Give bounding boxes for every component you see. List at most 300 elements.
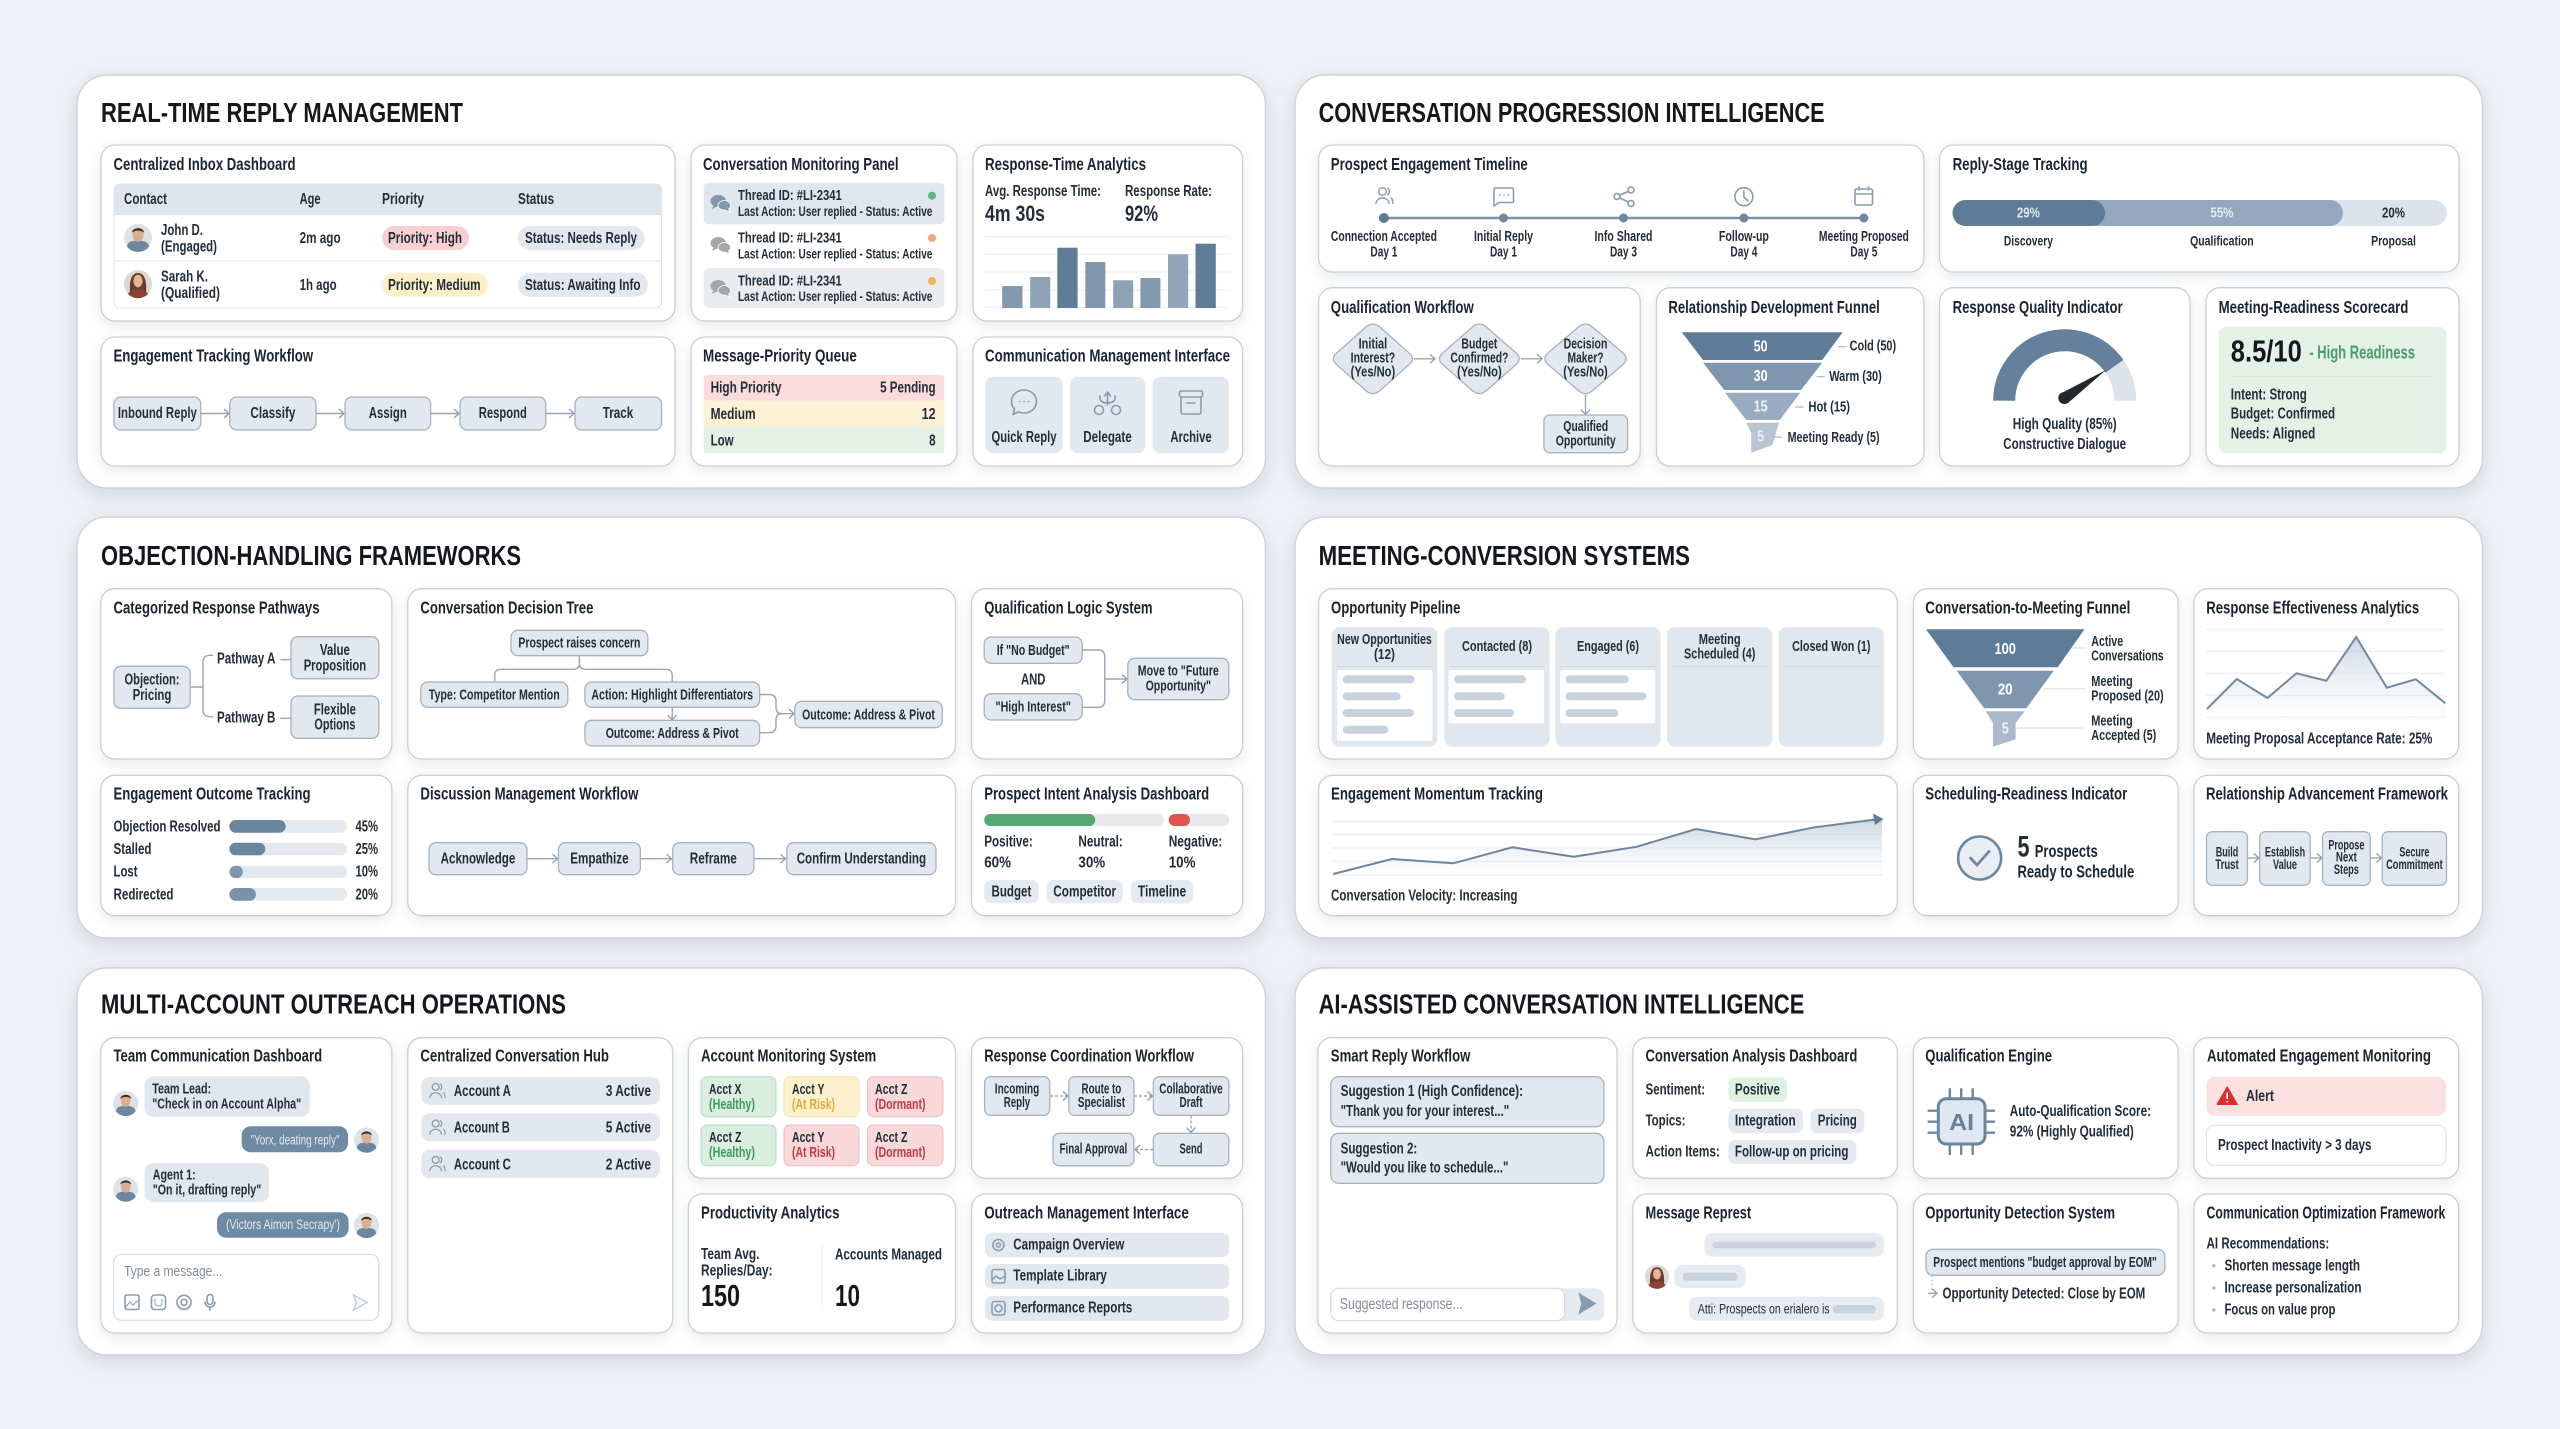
milestone: initial reply bbox=[1474, 188, 1533, 261]
card title: Scheduling-Readiness Indicator bbox=[1925, 783, 2127, 803]
card title: Discussion Management Workflow bbox=[420, 783, 639, 803]
funnel chart: 30 bbox=[1754, 368, 1768, 385]
funnel labels: Proposed (20) bbox=[2091, 688, 2164, 704]
column: meeting scheduled bbox=[1667, 627, 1772, 747]
avatar: John D. bbox=[124, 224, 152, 252]
decision: decision maker: Maker? bbox=[1568, 351, 1604, 367]
node: final outcome bbox=[795, 701, 942, 728]
card: message repres bbox=[1633, 1194, 1897, 1333]
workflow steps: Respond bbox=[479, 405, 527, 422]
milestone: initial reply: Day 1 bbox=[1490, 245, 1517, 261]
column: new opportunities bbox=[1332, 627, 1437, 747]
pill: priority medium bbox=[382, 273, 488, 297]
pill: status awaiting info bbox=[518, 273, 648, 297]
card: opportunity pipeline bbox=[1319, 589, 1897, 759]
tile: acct Z dormant 2 bbox=[868, 1125, 943, 1166]
decision: budget confirmed: (Yes/No) bbox=[1457, 365, 1502, 381]
funnel labels bbox=[2091, 634, 2164, 744]
card: scheduling-readiness indicator bbox=[1913, 775, 2178, 916]
funnel labels: Meeting bbox=[2091, 674, 2133, 690]
tile: acct Y at risk: Acct Y bbox=[792, 1082, 825, 1098]
workflow diagram: Specialist bbox=[1078, 1095, 1125, 1111]
card title: Response-Time Analytics bbox=[985, 154, 1146, 174]
pill: priority high: Priority: High bbox=[388, 230, 462, 247]
row: topics: Pricing bbox=[1818, 1113, 1857, 1130]
milestone: info shared: Day 3 bbox=[1610, 245, 1637, 261]
outcome: qualified opportunity: Opportunity bbox=[1556, 434, 1616, 450]
stacked stage bar bbox=[1953, 200, 2447, 226]
column: new opportunities: (12) bbox=[1374, 647, 1395, 663]
heading: AI-assisted conversation intelligence: AI-ASSISTED CONVERSATION INTELLIGENCE bbox=[1319, 989, 1804, 1020]
node: move to future opportunity: Move to "Future bbox=[1138, 664, 1219, 680]
menu: performance reports: Performance Reports bbox=[1013, 1300, 1132, 1317]
decision: initial interest: (Yes/No) bbox=[1351, 365, 1395, 381]
thread row 2: Last Action: User replied - Status: Active bbox=[738, 247, 933, 262]
thread row 3: Thread ID: #LI-2341 bbox=[738, 273, 842, 289]
AI recommendations list bbox=[2206, 1235, 2362, 1318]
outgoing placeholder bubble bbox=[1704, 1233, 1884, 1257]
card title: Message-Priority Queue bbox=[703, 346, 857, 366]
milestone: connection accepted: Day 1 bbox=[1370, 245, 1397, 261]
pill: status needs reply bbox=[518, 226, 644, 250]
card title: Prospect Intent Analysis Dashboard bbox=[984, 783, 1209, 803]
workflow steps: Track bbox=[603, 405, 634, 422]
row: account A: 3 Active bbox=[606, 1083, 651, 1100]
card: response quality indicator bbox=[1940, 288, 2190, 466]
panel: meeting-conversion systems bbox=[1295, 517, 2482, 938]
milestone: connection accepted: Connection Accepted bbox=[1331, 229, 1437, 245]
card: communication management interface bbox=[973, 337, 1242, 466]
row: redirected: Redirected bbox=[114, 886, 174, 903]
card title: Smart Reply Workflow bbox=[1331, 1046, 1471, 1066]
alert banner bbox=[2206, 1077, 2446, 1116]
framework steps: Secure bbox=[2399, 845, 2430, 860]
card: engagement tracking workflow bbox=[101, 337, 675, 466]
message: agent 1 bbox=[113, 1163, 269, 1202]
inbox table: Sarah K. bbox=[161, 269, 208, 286]
tile: acct Z dormant bbox=[868, 1077, 943, 1117]
row: action items bbox=[1646, 1140, 1856, 1164]
milestone: meeting proposed: Day 5 bbox=[1850, 245, 1877, 261]
framework steps: Steps bbox=[2334, 862, 2359, 877]
node: value proposition: Value bbox=[320, 642, 350, 659]
heading: multi-account outreach operations: MULTI-ACCOUNT OUTREACH OPERATIONS bbox=[101, 989, 566, 1020]
inbox table: (Qualified) bbox=[161, 285, 220, 302]
card: prospect engagement timeline bbox=[1319, 145, 1924, 272]
funnel chart bbox=[1682, 332, 1843, 453]
heading: conversation progression intelligence: CONVERSATION PROGRESSION INTELLIGENCE bbox=[1319, 97, 1825, 128]
card title: Account Monitoring System bbox=[701, 1046, 876, 1066]
card title: Response Effectiveness Analytics bbox=[2206, 597, 2419, 617]
queue rows: Low bbox=[711, 433, 734, 450]
outcome: qualified opportunity bbox=[1544, 415, 1628, 453]
workflow steps: Assign bbox=[369, 405, 407, 422]
card title: Centralized Conversation Hub bbox=[420, 1046, 609, 1066]
thread row 3: Last Action: User replied - Status: Active bbox=[738, 289, 933, 304]
row: action items: Action Items: bbox=[1646, 1144, 1720, 1161]
tile: acct X healthy bbox=[701, 1077, 776, 1117]
decision: budget confirmed: Confirmed? bbox=[1450, 351, 1509, 367]
suggested response input: Suggested response... bbox=[1340, 1296, 1463, 1313]
tile: acct Y at risk bbox=[784, 1077, 859, 1117]
readiness text bbox=[2018, 831, 2134, 881]
pathway labels bbox=[217, 650, 275, 727]
column: contacted bbox=[1444, 627, 1550, 747]
logic connectors bbox=[1082, 650, 1105, 707]
funnel labels: Hot (15) bbox=[1808, 400, 1850, 416]
node: if no budget bbox=[984, 637, 1082, 663]
chart caption: Conversation Velocity: Increasing bbox=[1331, 888, 1518, 905]
column: meeting scheduled: Scheduled (4) bbox=[1684, 647, 1756, 663]
tile: acct Y at risk red: (At Risk) bbox=[792, 1145, 835, 1161]
pathway labels: Pathway B bbox=[217, 710, 275, 727]
decision: initial interest: Interest? bbox=[1351, 351, 1395, 367]
workflow diagram: Final Approval bbox=[1060, 1142, 1127, 1158]
stage labels: Qualification bbox=[2190, 233, 2254, 248]
stacked stage bar: 20% bbox=[2382, 206, 2405, 222]
node: move to future opportunity bbox=[1128, 658, 1229, 700]
score box: Intent: Strong bbox=[2231, 386, 2307, 403]
metric: average response time: Avg. Response Time: bbox=[985, 183, 1101, 200]
detected signal bbox=[1926, 1249, 2165, 1275]
qualification score bbox=[2010, 1103, 2151, 1141]
milestone: follow-up: Follow-up bbox=[1719, 229, 1769, 245]
tile: acct Z healthy: (Healthy) bbox=[709, 1145, 755, 1161]
row: account B: 5 Active bbox=[606, 1120, 651, 1137]
thread row 2 bbox=[710, 231, 936, 262]
card: communication optimization framework bbox=[2194, 1194, 2459, 1333]
arrow bbox=[1521, 358, 1542, 360]
score box: - High Readiness bbox=[2309, 342, 2415, 362]
card title: Opportunity Detection System bbox=[1925, 1203, 2115, 1223]
row: topics: Integration bbox=[1735, 1113, 1796, 1130]
funnel labels: Meeting bbox=[2091, 714, 2133, 730]
node: flexible options: Options bbox=[314, 717, 355, 734]
outgoing message bubble: Atti: Prospects on erialero is bbox=[1698, 1301, 1830, 1316]
funnel leader lines bbox=[2017, 648, 2086, 728]
column: contacted: Contacted (8) bbox=[1462, 639, 1532, 655]
framework steps bbox=[2206, 832, 2446, 885]
decision: decision maker: Decision bbox=[1564, 337, 1607, 353]
card: discussion management workflow bbox=[408, 775, 956, 916]
framework steps: Propose bbox=[2328, 837, 2365, 852]
panel: conversation progression intelligence bbox=[1295, 75, 2482, 488]
AI recommendations list: Shorten message length bbox=[2224, 1258, 2360, 1275]
column: closed won bbox=[1779, 627, 1884, 747]
card title: Meeting-Readiness Scorecard bbox=[2219, 297, 2408, 317]
decision: decision maker: (Yes/No) bbox=[1563, 365, 1608, 381]
row: action items: Follow-up on pricing bbox=[1735, 1144, 1848, 1161]
workflow diagram: Collaborative bbox=[1159, 1081, 1223, 1097]
node: action highlight differentiators: Action: Highlight Differentiators bbox=[591, 687, 753, 703]
node: outcome address and pivot bbox=[585, 720, 760, 746]
tile: archive bbox=[1153, 377, 1229, 453]
node: value proposition bbox=[291, 637, 379, 679]
card: centralized conversation hub bbox=[408, 1038, 673, 1333]
score box: Needs: Aligned bbox=[2231, 426, 2315, 443]
tile: acct Y at risk: (At Risk) bbox=[792, 1097, 835, 1113]
node: value proposition: Proposition bbox=[304, 658, 366, 675]
framework steps: Commitment bbox=[2386, 857, 2443, 872]
tree connectors bbox=[495, 656, 672, 682]
row: account C: Account C bbox=[454, 1156, 511, 1173]
card title: Categorized Response Pathways bbox=[114, 597, 320, 617]
readiness text: Ready to Schedule bbox=[2018, 861, 2134, 881]
momentum chart bbox=[1331, 814, 1884, 875]
tile: acct Z dormant: (Dormant) bbox=[875, 1097, 926, 1113]
card title: Reply-Stage Tracking bbox=[1953, 154, 2088, 174]
row: account B: Account B bbox=[454, 1120, 510, 1137]
card title: Communication Management Interface bbox=[985, 346, 1230, 366]
column: engaged: Engaged (6) bbox=[1577, 639, 1639, 655]
decision: initial interest: Initial bbox=[1359, 337, 1387, 353]
card: qualification engine bbox=[1913, 1038, 2178, 1178]
card title: Qualification Logic System bbox=[984, 597, 1153, 617]
sentiment values: Negative: bbox=[1169, 834, 1222, 851]
card: prospect intent analysis dashboard bbox=[972, 775, 1243, 916]
node: type competitor mention: Type: Competitor Mention bbox=[429, 687, 560, 703]
card title: Productivity Analytics bbox=[701, 1203, 840, 1223]
message: agent 1: "On it, drafting reply" bbox=[153, 1182, 261, 1198]
gauge caption: Constructive Dialogue bbox=[2003, 436, 2126, 453]
heading: objection-handling frameworks: OBJECTION-HANDLING FRAMEWORKS bbox=[101, 540, 521, 571]
card: smart reply workflow bbox=[1318, 1038, 1617, 1333]
decision: initial interest bbox=[1333, 324, 1412, 394]
card: qualification logic system bbox=[972, 589, 1243, 759]
message: agent 1: Agent 1: bbox=[153, 1167, 196, 1183]
message input: Type a message... bbox=[124, 1264, 222, 1280]
node: objection pricing: Pricing bbox=[133, 687, 171, 704]
stage labels: Proposal bbox=[2371, 233, 2416, 248]
row: account C: 2 Active bbox=[606, 1156, 651, 1173]
row: account B bbox=[421, 1113, 660, 1141]
tile: delegate bbox=[1070, 377, 1145, 453]
outcome: qualified opportunity: Qualified bbox=[1563, 419, 1608, 435]
message: status bubble: (Victors Aimon Secrapy') bbox=[226, 1217, 340, 1232]
detected signal: Prospect mentions "budget approval by EOM" bbox=[1933, 1255, 2157, 1271]
metric: accounts managed: Accounts Managed bbox=[835, 1246, 942, 1263]
card: productivity analytics bbox=[688, 1194, 956, 1333]
AI recommendations list: AI Recommendations: bbox=[2206, 1235, 2329, 1252]
incoming placeholder bubble bbox=[1645, 1265, 1746, 1289]
column: meeting scheduled: Meeting bbox=[1699, 632, 1741, 648]
pill: priority high bbox=[382, 226, 469, 250]
row: stalled: Stalled bbox=[114, 841, 152, 858]
card: account monitoring system bbox=[688, 1038, 956, 1178]
funnel labels: Cold (50) bbox=[1850, 339, 1896, 355]
sentiment values: 30% bbox=[1078, 854, 1105, 871]
card: engagement outcome tracking bbox=[101, 775, 392, 916]
funnel labels: Meeting Ready (5) bbox=[1788, 430, 1880, 446]
framework steps: Next bbox=[2336, 850, 2357, 865]
workflow diagram bbox=[985, 1077, 1229, 1166]
metric: average response time bbox=[985, 183, 1101, 226]
suggestion 1: "Thank you for your interest..." bbox=[1341, 1103, 1509, 1120]
alert detail: Prospect Inactivity > 3 days bbox=[2218, 1137, 2372, 1154]
node: action highlight differentiators bbox=[585, 682, 760, 707]
milestone: initial reply: Initial Reply bbox=[1474, 229, 1533, 245]
milestone: connection accepted bbox=[1331, 188, 1437, 261]
menu: campaign overview: Campaign Overview bbox=[1013, 1236, 1125, 1253]
funnel labels: Accepted (5) bbox=[2091, 728, 2156, 744]
workflow steps bbox=[429, 843, 936, 875]
card title: Conversation Monitoring Panel bbox=[703, 154, 899, 174]
pill: status needs reply: Status: Needs Reply bbox=[525, 230, 637, 247]
stage labels: Discovery bbox=[2004, 233, 2053, 248]
row: objection resolved: Objection Resolved bbox=[114, 818, 220, 835]
icon: check circle bbox=[1958, 836, 2001, 880]
queue rows bbox=[704, 375, 944, 453]
chart caption: Meeting Proposal Acceptance Rate: 25% bbox=[2206, 730, 2433, 747]
arrow bbox=[1584, 394, 1586, 414]
card title: Prospect Engagement Timeline bbox=[1331, 154, 1528, 174]
funnel labels bbox=[1772, 339, 1896, 446]
framework steps: Build bbox=[2216, 845, 2238, 860]
metric: team average replies: 150 bbox=[701, 1278, 740, 1313]
funnel chart: 5 bbox=[2002, 720, 2009, 737]
stacked stage bar: 29% bbox=[2017, 206, 2040, 222]
card title: Automated Engagement Monitoring bbox=[2207, 1046, 2431, 1066]
row: lost: Lost bbox=[114, 864, 138, 881]
tile: acct Z healthy: Acct Z bbox=[709, 1130, 742, 1146]
card: conversation-to-meeting funnel bbox=[1913, 589, 2178, 759]
funnel chart: 15 bbox=[1754, 398, 1768, 415]
card: automated engagement monitoring bbox=[2194, 1038, 2459, 1178]
workflow steps: Reframe bbox=[690, 850, 737, 867]
card: outreach management interface bbox=[972, 1194, 1243, 1333]
score box: Budget: Confirmed bbox=[2231, 406, 2335, 423]
thread row 1 bbox=[704, 183, 944, 224]
funnel labels: Conversations bbox=[2091, 648, 2164, 664]
topic tags: Competitor bbox=[1053, 884, 1116, 901]
funnel chart: 20 bbox=[1998, 681, 2013, 698]
framework steps: Value bbox=[2273, 857, 2297, 872]
outgoing message bubble bbox=[1689, 1297, 1884, 1321]
row: objection resolved bbox=[114, 818, 378, 835]
metric: average response time: 4m 30s bbox=[985, 201, 1045, 226]
row: sentiment: Positive bbox=[1735, 1082, 1780, 1099]
tile: acct X healthy: Acct X bbox=[709, 1082, 742, 1098]
node: flexible options: Flexible bbox=[314, 701, 356, 718]
card: meeting-readiness scorecard bbox=[2206, 288, 2459, 466]
pathway connectors bbox=[190, 655, 291, 718]
node: outcome address and pivot: Outcome: Address & Pivot bbox=[606, 726, 739, 742]
heading: real-time reply management: REAL-TIME REPLY MANAGEMENT bbox=[101, 97, 463, 128]
AI recommendations list: Increase personalization bbox=[2224, 1279, 2362, 1296]
workflow steps bbox=[114, 397, 662, 430]
metric: accounts managed: 10 bbox=[835, 1278, 860, 1313]
inbox table: Priority bbox=[382, 191, 424, 208]
sentiment values: Neutral: bbox=[1078, 834, 1123, 851]
row: account C bbox=[421, 1150, 660, 1178]
column: new opportunities: New Opportunities bbox=[1337, 632, 1432, 648]
suggested response input bbox=[1331, 1288, 1604, 1321]
menu: campaign overview bbox=[985, 1233, 1229, 1257]
card: relationship advancement framework bbox=[2194, 775, 2459, 916]
workflow steps: Acknowledge bbox=[441, 850, 516, 867]
row: sentiment: Sentiment: bbox=[1646, 1082, 1705, 1099]
node: high interest: "High Interest" bbox=[996, 700, 1071, 716]
funnel chart: 100 bbox=[1994, 641, 2016, 658]
message: team lead bbox=[113, 1076, 310, 1117]
qualification score: 92% (Highly Qualified) bbox=[2010, 1124, 2134, 1141]
alert banner: Alert bbox=[2246, 1088, 2274, 1105]
tile: quick reply: Quick Reply bbox=[992, 429, 1057, 446]
menu: template library bbox=[985, 1264, 1229, 1289]
milestone: follow-up bbox=[1719, 188, 1769, 261]
readiness text: 5 bbox=[2018, 831, 2030, 864]
card: response-time analytics bbox=[973, 145, 1242, 321]
inbox table: John D. bbox=[161, 222, 203, 239]
workflow diagram: Reply bbox=[1004, 1095, 1030, 1111]
row: stalled: 25% bbox=[356, 841, 378, 858]
timeline axis bbox=[1379, 213, 1868, 223]
card title: Conversation Decision Tree bbox=[420, 597, 594, 617]
row: topics: Topics: bbox=[1646, 1113, 1686, 1130]
row: redirected: 20% bbox=[356, 886, 378, 903]
card: relationship development funnel bbox=[1656, 288, 1924, 466]
row: topics bbox=[1646, 1109, 1864, 1133]
card title: Conversation Analysis Dashboard bbox=[1646, 1046, 1857, 1066]
framework steps: Trust bbox=[2215, 857, 2239, 872]
node: prospect raises concern: Prospect raises concern bbox=[518, 636, 640, 652]
message: reply bubble bbox=[242, 1126, 379, 1153]
row: account A: Account A bbox=[454, 1083, 511, 1100]
heading: meeting-conversion systems: MEETING-CONVERSION SYSTEMS bbox=[1319, 540, 1690, 571]
tile: archive: Archive bbox=[1170, 429, 1212, 446]
workflow diagram: Send bbox=[1180, 1142, 1202, 1158]
tile: acct Z dormant: Acct Z bbox=[875, 1082, 908, 1098]
card title: Opportunity Pipeline bbox=[1331, 597, 1461, 617]
node: prospect raises concern bbox=[511, 630, 648, 656]
sentiment values: 60% bbox=[984, 854, 1011, 871]
operator: and: AND bbox=[1021, 672, 1045, 689]
funnel chart bbox=[1926, 629, 2084, 747]
alert detail bbox=[2206, 1125, 2446, 1165]
tile: quick reply bbox=[985, 377, 1063, 453]
gauge caption: High Quality (85%) bbox=[2013, 416, 2117, 433]
readiness text: Prospects bbox=[2035, 841, 2098, 861]
workflow diagram: Route to bbox=[1082, 1081, 1121, 1097]
AI recommendations list: Focus on value prop bbox=[2224, 1301, 2336, 1318]
message: reply bubble: "Yorx, deating reply" bbox=[250, 1132, 340, 1147]
decision: budget confirmed: Budget bbox=[1461, 337, 1498, 353]
card: message-priority queue bbox=[691, 337, 957, 466]
card: conversation analysis dashboard bbox=[1633, 1038, 1897, 1178]
node: objection pricing: Objection: bbox=[124, 671, 180, 688]
node: move to future opportunity: Opportunity" bbox=[1146, 679, 1211, 695]
card title: Relationship Advancement Framework bbox=[2206, 783, 2448, 803]
merge connector bbox=[760, 694, 794, 714]
panel: multi-account outreach operations bbox=[77, 968, 1266, 1355]
decision: decision maker bbox=[1545, 324, 1626, 394]
row: lost bbox=[114, 864, 378, 881]
tile: acct Z dormant 2: (Dormant) bbox=[875, 1145, 926, 1161]
metric: response rate bbox=[1125, 183, 1212, 226]
row: account A bbox=[421, 1077, 660, 1105]
topic tags: Timeline bbox=[1138, 884, 1186, 901]
card: response coordination workflow bbox=[972, 1038, 1243, 1178]
suggestion 1 bbox=[1331, 1077, 1604, 1127]
card title: Response Coordination Workflow bbox=[984, 1046, 1194, 1066]
line chart bbox=[2206, 629, 2445, 717]
pill: status awaiting info: Status: Awaiting Info bbox=[525, 277, 640, 294]
score box bbox=[2219, 327, 2446, 453]
row: stalled bbox=[114, 841, 378, 858]
metric: team average replies: Team Avg. bbox=[701, 1246, 760, 1263]
framework steps: Establish bbox=[2265, 845, 2305, 860]
queue rows: High Priority bbox=[711, 380, 782, 397]
